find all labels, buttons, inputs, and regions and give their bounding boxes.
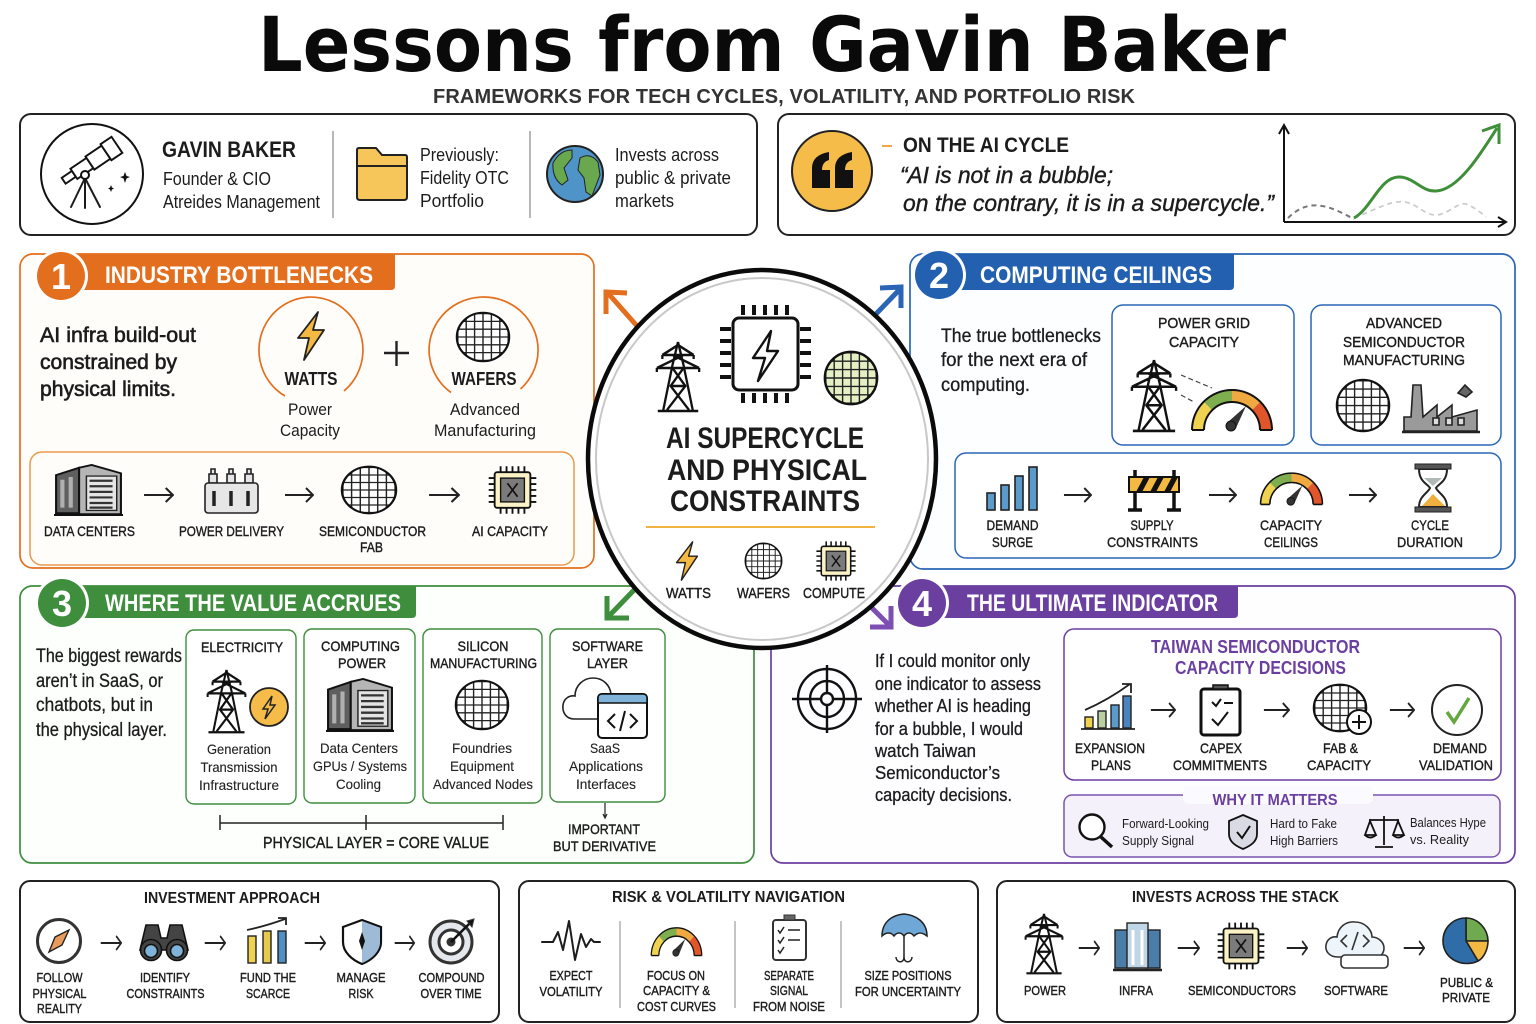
flow labels: CYCLE [1411, 517, 1449, 533]
icon: expansion plans chart [1081, 684, 1135, 729]
panel: quote [778, 114, 1515, 235]
panel: investment approach [20, 881, 499, 1022]
panel 2: computing ceilings [910, 248, 1515, 569]
card: software layer: LAYER [587, 655, 628, 671]
center hub: AI supercycle [588, 270, 936, 648]
icon: semiconductor fab wafer [340, 465, 398, 515]
card: Taiwan Semiconductor capacity decisions: TAIWAN SEMICONDUCTOR [1151, 637, 1360, 657]
title: Lessons from Gavin Baker [258, 0, 1286, 89]
header band: 4 [912, 583, 932, 624]
card: silicon manufacturing: SILICON [458, 638, 508, 654]
flow labels: DATA CENTERS [44, 523, 135, 539]
flow labels [1075, 740, 1493, 773]
labels: OVER TIME [420, 986, 482, 1001]
labels: PUBLIC & [1440, 975, 1493, 990]
card: computing power: GPUs / Systems [313, 758, 407, 774]
hub title: AI SUPERCYCLE [666, 422, 864, 455]
arrow: to section 3 [607, 588, 636, 618]
icon: pie chart [1443, 918, 1488, 964]
icon: compass [38, 920, 80, 962]
icon: umbrella [882, 914, 927, 962]
header band [912, 248, 1234, 302]
body text: The true bottlenecks [941, 326, 1101, 347]
header band [895, 576, 1238, 630]
body text: constrained by [40, 351, 177, 374]
arrow: to section 1 [606, 292, 637, 326]
body text: Semiconductor’s [875, 762, 1000, 783]
physical layer bracket [220, 815, 503, 852]
body text [36, 646, 182, 741]
flow labels: VALIDATION [1419, 757, 1493, 773]
flow labels: CAPACITY [1260, 517, 1323, 533]
body text [40, 324, 196, 401]
card: software layer [550, 629, 665, 802]
flow labels [44, 523, 549, 555]
card: silicon manufacturing: MANUFACTURING [430, 655, 537, 671]
labels: EXPECT [550, 968, 593, 983]
flow labels: CEILINGS [1264, 534, 1318, 550]
body text: one indicator to assess [875, 673, 1041, 694]
body text: chatbots, but in [36, 695, 153, 716]
flow labels: CAPACITY [1307, 757, 1372, 773]
card: software layer: Applications [569, 758, 643, 774]
flow labels: CAPEX [1200, 740, 1243, 756]
icon: cloud and software [1326, 922, 1388, 968]
watts badge: Capacity [280, 421, 340, 440]
flow labels [986, 517, 1463, 550]
card: power grid capacity: CAPACITY [1169, 334, 1239, 351]
icon: clipboard [1201, 685, 1240, 735]
previously text [420, 145, 509, 211]
card: advanced semiconductor manufacturing: SEMICONDUCTOR [1343, 334, 1465, 351]
role [163, 169, 320, 212]
card: advanced semiconductor manufacturing: MANUFACTURING [1343, 352, 1465, 369]
icon: data centers [54, 465, 123, 515]
hub title [666, 422, 867, 518]
labels: CAPACITY & [643, 983, 710, 998]
body text: computing. [941, 375, 1030, 396]
labels: FOCUS ON [647, 968, 705, 983]
watts badge: WATTS [284, 369, 338, 389]
hub icons and labels: WAFERS [737, 586, 790, 602]
arrow: to section 4 [868, 604, 891, 627]
icon: shield [1229, 815, 1257, 849]
body text: whether AI is heading [874, 695, 1031, 716]
panel 1: industry bottlenecks [20, 249, 594, 568]
body text: for the next era of [941, 350, 1088, 371]
header band: 1 [51, 256, 71, 297]
icon: power tower [1026, 914, 1062, 973]
labels: CONSTRAINTS [126, 986, 205, 1001]
icon: binoculars [140, 925, 188, 960]
body text: for a bubble, I would [875, 718, 1023, 739]
panel 3: where the value accrues [20, 576, 754, 863]
card: advanced semiconductor manufacturing [1311, 305, 1501, 445]
labels: MANAGE [336, 970, 386, 985]
labels: FOR UNCERTAINTY [855, 984, 961, 999]
flow labels: SEMICONDUCTOR [319, 523, 426, 539]
flow labels: AI CAPACITY [472, 523, 549, 539]
labels: REALITY [37, 1001, 82, 1016]
watts badge [259, 297, 363, 440]
body text: AI infra build-out [40, 324, 196, 347]
panel 4: the ultimate indicator [771, 576, 1515, 863]
card: electricity: Transmission [200, 759, 278, 775]
card: why it matters: Balances Hype [1410, 815, 1486, 830]
header band: 3 [52, 583, 72, 624]
flow labels: FAB [360, 539, 383, 555]
flow labels: DEMAND [986, 517, 1038, 533]
card: why it matters: vs. Reality [1410, 832, 1469, 847]
flow labels: SURGE [992, 534, 1033, 550]
header band: COMPUTING CEILINGS [980, 262, 1212, 289]
chart: supercycle curve [1279, 125, 1506, 227]
invests text: markets [615, 191, 674, 211]
invests text [615, 145, 731, 211]
card: computing power: Cooling [336, 776, 381, 792]
flow labels: EXPANSION [1075, 740, 1145, 756]
labels: IDENTIFY [140, 970, 190, 985]
icon: gauge [651, 928, 702, 956]
card: why it matters [1064, 786, 1500, 857]
flow labels: PLANS [1091, 757, 1131, 773]
icon: capacity gauge [1261, 473, 1322, 505]
icon: validation check [1432, 685, 1482, 735]
body text: If I could monitor only [875, 650, 1031, 671]
icon: hourglass [1415, 464, 1451, 512]
card: why it matters: Hard to Fake [1270, 816, 1337, 831]
derivative note: IMPORTANT [568, 821, 640, 837]
icon: demand bars [987, 467, 1037, 510]
card: electricity [186, 630, 296, 804]
labels [540, 968, 961, 1014]
card: why it matters: Forward-Looking [1122, 816, 1209, 831]
card: power grid capacity: POWER GRID [1158, 315, 1250, 332]
labels: INFRA [1119, 983, 1153, 998]
labels: SIGNAL [770, 983, 808, 998]
labels: PHYSICAL [32, 986, 86, 1001]
flow: path to AI capacity [30, 452, 574, 565]
arrow: to section 2 [876, 287, 901, 314]
card: power grid capacity [1112, 305, 1294, 445]
flow labels: COMMITMENTS [1173, 757, 1267, 773]
card: silicon manufacturing: Foundries [452, 740, 512, 756]
panel: invests across the stack: INVESTS ACROSS THE STACK [1132, 889, 1339, 906]
previously text: Portfolio [420, 191, 484, 211]
flow labels: SUPPLY [1130, 517, 1174, 533]
role: Founder & CIO [163, 169, 271, 189]
card: silicon manufacturing: Advanced Nodes [433, 776, 533, 792]
derivative note [553, 803, 656, 854]
labels: SIZE POSITIONS [864, 968, 952, 983]
card: why it matters: WHY IT MATTERS [1212, 792, 1338, 809]
body text: The biggest rewards [36, 646, 182, 667]
icon: clipboard checklist [773, 915, 806, 960]
card: software layer: SOFTWARE [572, 638, 643, 654]
labels: VOLATILITY [540, 984, 603, 999]
header band: INDUSTRY BOTTLENECKS [105, 262, 373, 289]
physical layer bracket: PHYSICAL LAYER = CORE VALUE [263, 835, 489, 852]
icon: globe [547, 146, 603, 202]
icon: quotation mark [792, 131, 872, 211]
card: why it matters: Supply Signal [1122, 833, 1194, 848]
panel: invests across the stack [997, 881, 1515, 1022]
card: computing power: POWER [338, 655, 386, 671]
name: GAVIN BAKER [162, 137, 296, 162]
labels: FUND THE [240, 970, 296, 985]
icon: barrier [1128, 470, 1181, 510]
subtitle: FRAMEWORKS FOR TECH CYCLES, VOLATILITY, AND PORTFOLIO RISK [433, 86, 1136, 108]
card: silicon manufacturing [423, 629, 542, 803]
flow labels: CONSTRAINTS [1107, 534, 1198, 550]
panel: risk and volatility navigation [519, 881, 978, 1022]
previously text: Fidelity OTC [420, 168, 509, 188]
invests text: public & private [615, 168, 731, 188]
panel: investment approach: INVESTMENT APPROACH [144, 890, 320, 907]
icon: wafer with plus [1312, 683, 1371, 734]
icon: folder [357, 148, 407, 200]
wafers badge: Advanced [450, 400, 520, 419]
body text: watch Taiwan [874, 740, 976, 761]
icon: tower [657, 342, 699, 411]
header band: 2 [929, 255, 949, 296]
hub title: CONSTRAINTS [670, 485, 860, 518]
labels: FROM NOISE [753, 999, 825, 1014]
wafers badge: Manufacturing [434, 421, 536, 440]
body text [941, 326, 1101, 396]
body text: capacity decisions. [875, 784, 1012, 805]
plus sign [384, 341, 409, 366]
header band [35, 576, 416, 630]
flow labels: DURATION [1397, 534, 1463, 550]
card: computing power: COMPUTING [321, 638, 400, 654]
card: electricity: Generation [207, 741, 271, 757]
card: software layer: Interfaces [576, 776, 636, 792]
labels [32, 970, 484, 1016]
card: silicon manufacturing: Equipment [450, 758, 514, 774]
labels: FOLLOW [36, 970, 83, 985]
card: computing power: Data Centers [320, 740, 398, 756]
icon: fund bars [247, 918, 286, 963]
labels [1024, 975, 1493, 1005]
role: Atreides Management [163, 192, 320, 212]
derivative note: BUT DERIVATIVE [553, 838, 656, 854]
labels: RISK [348, 986, 374, 1001]
header band [34, 249, 395, 303]
wafers badge [429, 297, 538, 440]
card: Taiwan Semiconductor capacity decisions: CAPACITY DECISIONS [1175, 658, 1346, 678]
hub icons and labels: WATTS [666, 586, 711, 602]
quote text: on the contrary, it is in a supercycle.” [903, 190, 1275, 216]
body text: aren’t in SaaS, or [36, 671, 164, 692]
card: Taiwan Semiconductor capacity decisions [1064, 629, 1501, 780]
invests text: Invests across [615, 145, 719, 165]
panel: profile [20, 114, 757, 235]
body text: the physical layer. [36, 720, 167, 741]
flow labels: FAB & [1323, 740, 1359, 756]
hub title: AND PHYSICAL [667, 454, 867, 487]
labels: SOFTWARE [1324, 983, 1388, 998]
quote heading: ON THE AI CYCLE [903, 134, 1069, 157]
quote text [900, 162, 1275, 216]
labels: SEPARATE [764, 968, 814, 983]
labels: SCARCE [246, 986, 290, 1001]
card: why it matters: High Barriers [1270, 833, 1338, 848]
panel: risk and volatility navigation: RISK & VOLATILITY NAVIGATION [612, 889, 845, 906]
icon: target [430, 919, 474, 963]
quote text: “AI is not in a bubble; [900, 162, 1113, 188]
wafers badge: WAFERS [452, 369, 516, 389]
header band: THE ULTIMATE INDICATOR [967, 590, 1218, 617]
labels: COST CURVES [637, 999, 716, 1014]
labels: PRIVATE [1442, 990, 1490, 1005]
icon: AI capacity chip [489, 466, 536, 514]
body text [874, 650, 1041, 805]
icon: infrastructure [1113, 923, 1162, 970]
hub icons and labels: COMPUTE [803, 586, 865, 602]
hub icons and labels [666, 541, 865, 602]
icon: chip with bolt [720, 305, 811, 403]
card: software layer: SaaS [590, 740, 620, 756]
labels: SEMICONDUCTORS [1188, 983, 1296, 998]
watts badge: Power [288, 400, 332, 419]
icon: green wafer [823, 350, 879, 406]
labels: COMPOUND [418, 970, 484, 985]
card: electricity: Infrastructure [199, 777, 279, 793]
icon: crosshair target [792, 665, 862, 733]
icon: power delivery [205, 469, 258, 513]
labels: POWER [1024, 983, 1066, 998]
icon: scales [1365, 816, 1404, 847]
flow labels: DEMAND [1433, 740, 1487, 756]
flow: cycle stages [955, 453, 1501, 558]
icon: shield [343, 920, 381, 964]
icon: factory [1402, 385, 1480, 432]
card: electricity: ELECTRICITY [201, 639, 284, 655]
body text: physical limits. [40, 378, 176, 401]
icon: magnifier [1080, 814, 1112, 847]
card: advanced semiconductor manufacturing: ADVANCED [1366, 315, 1442, 332]
previously text: Previously: [420, 145, 499, 165]
card: computing power [304, 629, 415, 803]
icon: telescope [41, 124, 143, 224]
icon: chip [1218, 923, 1264, 969]
header band: WHERE THE VALUE ACCRUES [105, 590, 401, 617]
icon: pulse [542, 921, 600, 960]
flow labels: POWER DELIVERY [179, 523, 285, 539]
